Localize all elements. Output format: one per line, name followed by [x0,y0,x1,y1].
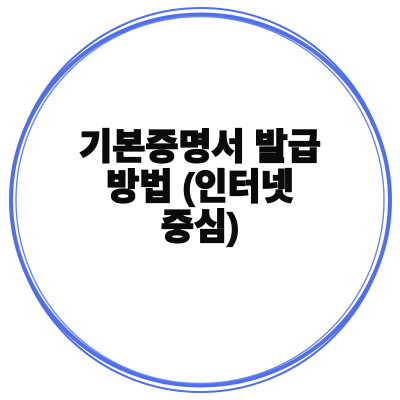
title: 중심) [161,206,239,247]
title: 기본증명서 발급 [79,126,321,167]
title: 방법 (인터넷 [106,166,294,207]
title [79,126,321,248]
